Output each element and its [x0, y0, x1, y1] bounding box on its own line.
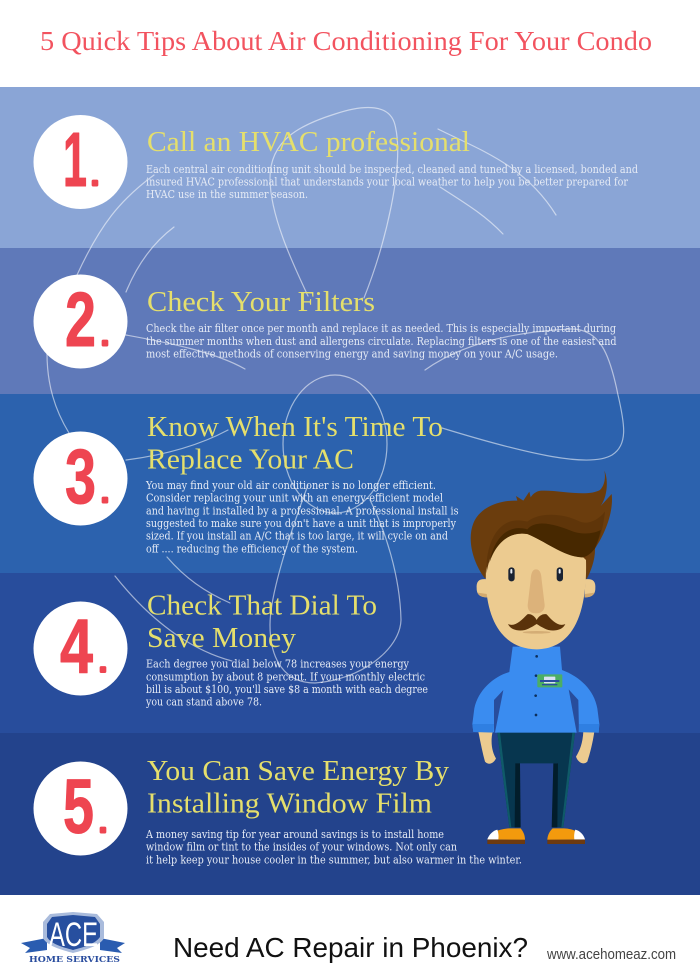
- number badge 4: [34, 602, 128, 696]
- body text 2: the summer months when dust and allergens circulate. Replacing filters is one of the easiest and: [146, 334, 617, 348]
- number badge 1: .: [91, 161, 99, 191]
- number badge 5: [34, 762, 128, 856]
- body text 5: window film or tint to the insides of your windows. Not only can: [146, 840, 457, 854]
- body text 4: consumption by about 8 percent. If your monthly electric: [146, 669, 425, 683]
- panel: tip 2: [0, 248, 700, 394]
- footer: ACE Home Services logo: ACE: [49, 916, 98, 954]
- heading 2: Check Your Filters: [147, 287, 375, 318]
- character: shirt: [472, 647, 599, 733]
- body text 2: Check the air filter once per month and replace it as needed. This is especially important during: [146, 321, 617, 335]
- number badge 1: 1: [63, 117, 87, 203]
- panel: tip 3: [0, 394, 700, 573]
- heading 5: You Can Save Energy By: [147, 756, 449, 787]
- heading 4: [147, 590, 377, 654]
- heading 3: Replace Your AC: [147, 444, 354, 476]
- body text 2: [146, 321, 617, 360]
- body text 5: it help keep your house cooler in the summer, but also warmer in the winter.: [146, 852, 522, 866]
- number badge 1: [34, 115, 128, 209]
- heading 1: Call an HVAC professional: [147, 127, 470, 158]
- illustration: HVAC technician character: [471, 471, 612, 844]
- body text 5: [145, 827, 522, 866]
- number badge 5: .: [99, 808, 107, 838]
- number badge 2: 2: [65, 277, 96, 363]
- footer: ACE Home Services logo: HOME SERVICES: [29, 955, 120, 965]
- heading 5: Installing Window Film: [147, 789, 432, 820]
- panel: tip 1: [0, 87, 700, 248]
- body text 4: [145, 657, 428, 709]
- body text 4: bill is about $100, you'll save $8 a month with each degree: [146, 682, 428, 696]
- number badge 4: 4: [60, 604, 93, 690]
- body text 4: Each degree you dial below 78 increases your energy: [146, 657, 409, 671]
- body text 1: HVAC use in the summer season.: [146, 187, 308, 201]
- character: hair fringe: [487, 512, 605, 573]
- heading 5: [147, 756, 449, 820]
- character: ears: [477, 579, 595, 597]
- character: nose: [528, 569, 545, 613]
- number badge 2: [34, 274, 128, 368]
- character: moustache: [508, 614, 565, 634]
- character: name badge: [537, 674, 562, 687]
- heading 3: Know When It's Time To: [147, 412, 443, 443]
- body text 3: You may find your old air conditioner is no longer efficient.: [145, 478, 436, 492]
- body text 3: sized. If you install an A/C that is too large, it will cycle on and: [146, 529, 449, 543]
- character: hair back: [471, 471, 612, 579]
- body text 3: Consider replacing your unit with an energy-efficient model: [146, 491, 443, 505]
- body text 2: most effective methods of conserving energy and saving money on your A/C usage.: [146, 346, 558, 360]
- body text 3: suggested to make sure you don't have a unit that is improperly: [146, 516, 456, 530]
- footer: call to action: Need AC Repair in Phoenix?: [173, 932, 528, 963]
- body text 5: A money saving tip for year around savings is to install home: [145, 827, 444, 841]
- number badge 4: .: [99, 648, 107, 678]
- heading 3: [147, 412, 443, 476]
- character: hands: [478, 732, 594, 764]
- body text 4: you can stand above 78.: [145, 695, 262, 709]
- footer: website: www.acehomeaz.com: [546, 947, 676, 963]
- number badge 5: 5: [63, 764, 94, 850]
- body text 3: [145, 478, 459, 555]
- body text 3: and having it installed by a professional. A professional install is: [146, 503, 459, 517]
- character: face: [486, 533, 586, 649]
- number badge 3: .: [101, 478, 109, 508]
- body text 3: off .... reducing the efficiency of the system.: [146, 541, 358, 555]
- character: eyes: [508, 567, 563, 581]
- fan outline illustration: [47, 108, 624, 683]
- panel: tip 4: [0, 573, 700, 733]
- heading 4: Check That Dial To: [147, 590, 377, 622]
- character: shoes: [487, 828, 585, 844]
- number badge 3: [34, 432, 128, 526]
- footer: ACE Home Services logo: [21, 912, 125, 965]
- panel: tip 5: [0, 733, 700, 895]
- number badge 2: .: [101, 321, 109, 351]
- title: 5 Quick Tips About Air Conditioning For Your Condo: [40, 26, 652, 56]
- body text 1: [146, 162, 639, 201]
- number badge 3: 3: [65, 434, 96, 520]
- character: pants: [497, 733, 575, 827]
- heading 4: Save Money: [147, 623, 296, 654]
